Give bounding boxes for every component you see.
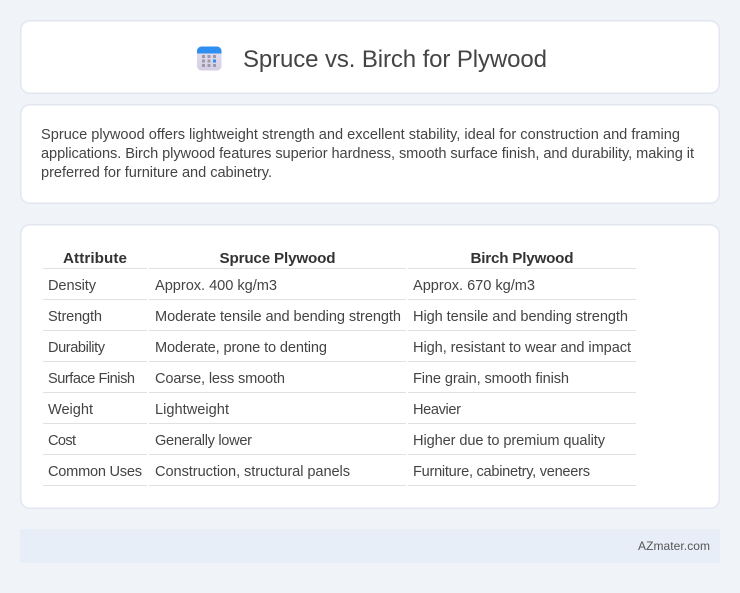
row: common uses: Furniture, cabinetry, veneers [413,464,590,480]
row: weight: Heavier [413,402,461,418]
row: density: Density [48,278,97,294]
row: strength: High tensile and bending strength [413,309,628,325]
row: strength [48,309,628,325]
panel: summary [21,105,719,203]
summary text: applications. Birch plywood features superior hardness, smooth surface finish, and durability, making it [41,146,694,162]
title: Spruce vs. Birch for Plywood [243,46,547,73]
row: density [48,278,535,294]
table header: Attribute [63,250,127,267]
row: surface finish: Coarse, less smooth [155,371,285,387]
row: cost: Higher due to premium quality [413,433,606,449]
table row lines [43,268,636,486]
panel: comparison table [21,225,719,508]
row: cost [48,433,606,449]
summary text: Spruce plywood offers lightweight strength and excellent stability, ideal for construction and framing [41,127,680,143]
row: durability: Durability [48,340,106,356]
row: strength: Strength [48,309,102,325]
row: durability [48,340,631,356]
row: density: Approx. 670 kg/m3 [413,278,535,294]
row: common uses [48,464,590,480]
panel: title card [21,21,719,93]
table header: Birch Plywood [470,250,574,267]
row: cost: Generally lower [155,433,252,449]
row: density: Approx. 400 kg/m3 [155,278,277,294]
row: common uses: Common Uses [48,464,142,480]
row: surface finish: Fine grain, smooth finish [413,371,569,387]
summary text: preferred for furniture and cabinetry. [41,165,272,181]
footer brand: AZmater.com [638,539,710,553]
row: surface finish [48,371,569,387]
icon: calendar [197,46,222,70]
table header: Spruce Plywood [220,250,336,267]
footer bar [20,529,720,563]
row: cost: Cost [48,433,76,449]
row: durability: Moderate, prone to denting [155,340,327,356]
row: common uses: Construction, structural panels [155,464,350,480]
row: durability: High, resistant to wear and impact [413,340,631,356]
table header [63,250,574,267]
summary text [41,127,694,181]
row: weight: Weight [48,402,93,418]
row: surface finish: Surface Finish [48,371,135,387]
row: strength: Moderate tensile and bending strength [155,309,401,325]
row: weight: Lightweight [155,402,229,418]
row: weight [48,402,461,418]
